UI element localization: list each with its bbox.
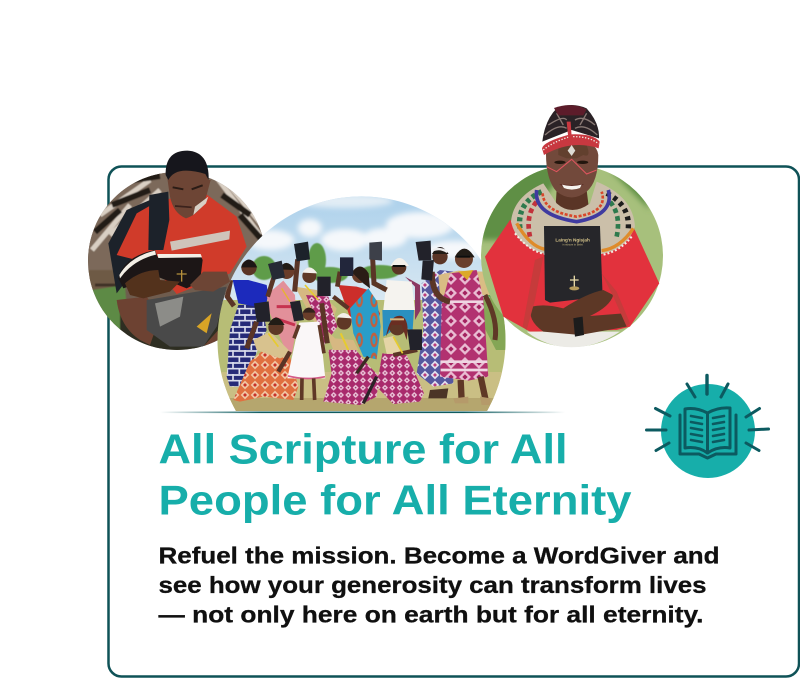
woman 2 (267, 281, 297, 355)
photo: group of women holding Bibles (215, 188, 510, 415)
neck (555, 190, 590, 217)
head (546, 140, 598, 197)
books (294, 242, 310, 261)
large woman and arms (438, 271, 492, 295)
hands (125, 270, 180, 298)
photo: woman in beaded collar holding a Bible (480, 105, 665, 350)
body text: see how your generosity can transform lives (158, 572, 706, 598)
title: All Scripture for All (158, 426, 568, 472)
icon: rays (646, 376, 768, 450)
title (158, 426, 632, 524)
book (118, 250, 203, 288)
Bible (544, 226, 603, 303)
head (167, 165, 211, 218)
photo: man reading a Bible (88, 151, 268, 352)
hands (530, 290, 627, 335)
body text: Refuel the mission. Become a WordGiver and (158, 542, 720, 568)
ground (215, 300, 510, 415)
clouds (246, 194, 485, 259)
woman: white top blue skirt (405, 277, 421, 320)
body text (158, 542, 720, 628)
blue top woman (227, 305, 267, 387)
body text: — not only here on earth but for all eternity. (158, 602, 704, 628)
shirt (117, 194, 247, 294)
girl (287, 322, 325, 378)
kneeling centre (323, 347, 379, 405)
red cape (485, 220, 659, 332)
face (554, 161, 566, 164)
woman: back right patterned (417, 270, 453, 387)
decorative fade line under the group photo (160, 412, 565, 413)
title: People for All Eternity (158, 476, 632, 524)
hair (542, 105, 599, 142)
kneeling right (377, 353, 424, 404)
photo: woman in beaded collar holding a Bible: in ntinore in Belet (562, 243, 583, 247)
woman: blue wrap (339, 285, 380, 323)
photo: woman in beaded collar holding a Bible: Laing'n Ngisjah (555, 238, 590, 243)
kneeling left orange (233, 350, 298, 402)
icon: open book (680, 408, 736, 458)
trees (252, 243, 507, 299)
panel: rounded card outline (108, 166, 799, 676)
headband (542, 134, 600, 155)
beaded collar (511, 182, 635, 254)
woman with tan top and magenta (297, 287, 336, 322)
white skirt (527, 332, 620, 347)
icon: open book in teal circle with rays (646, 376, 768, 478)
